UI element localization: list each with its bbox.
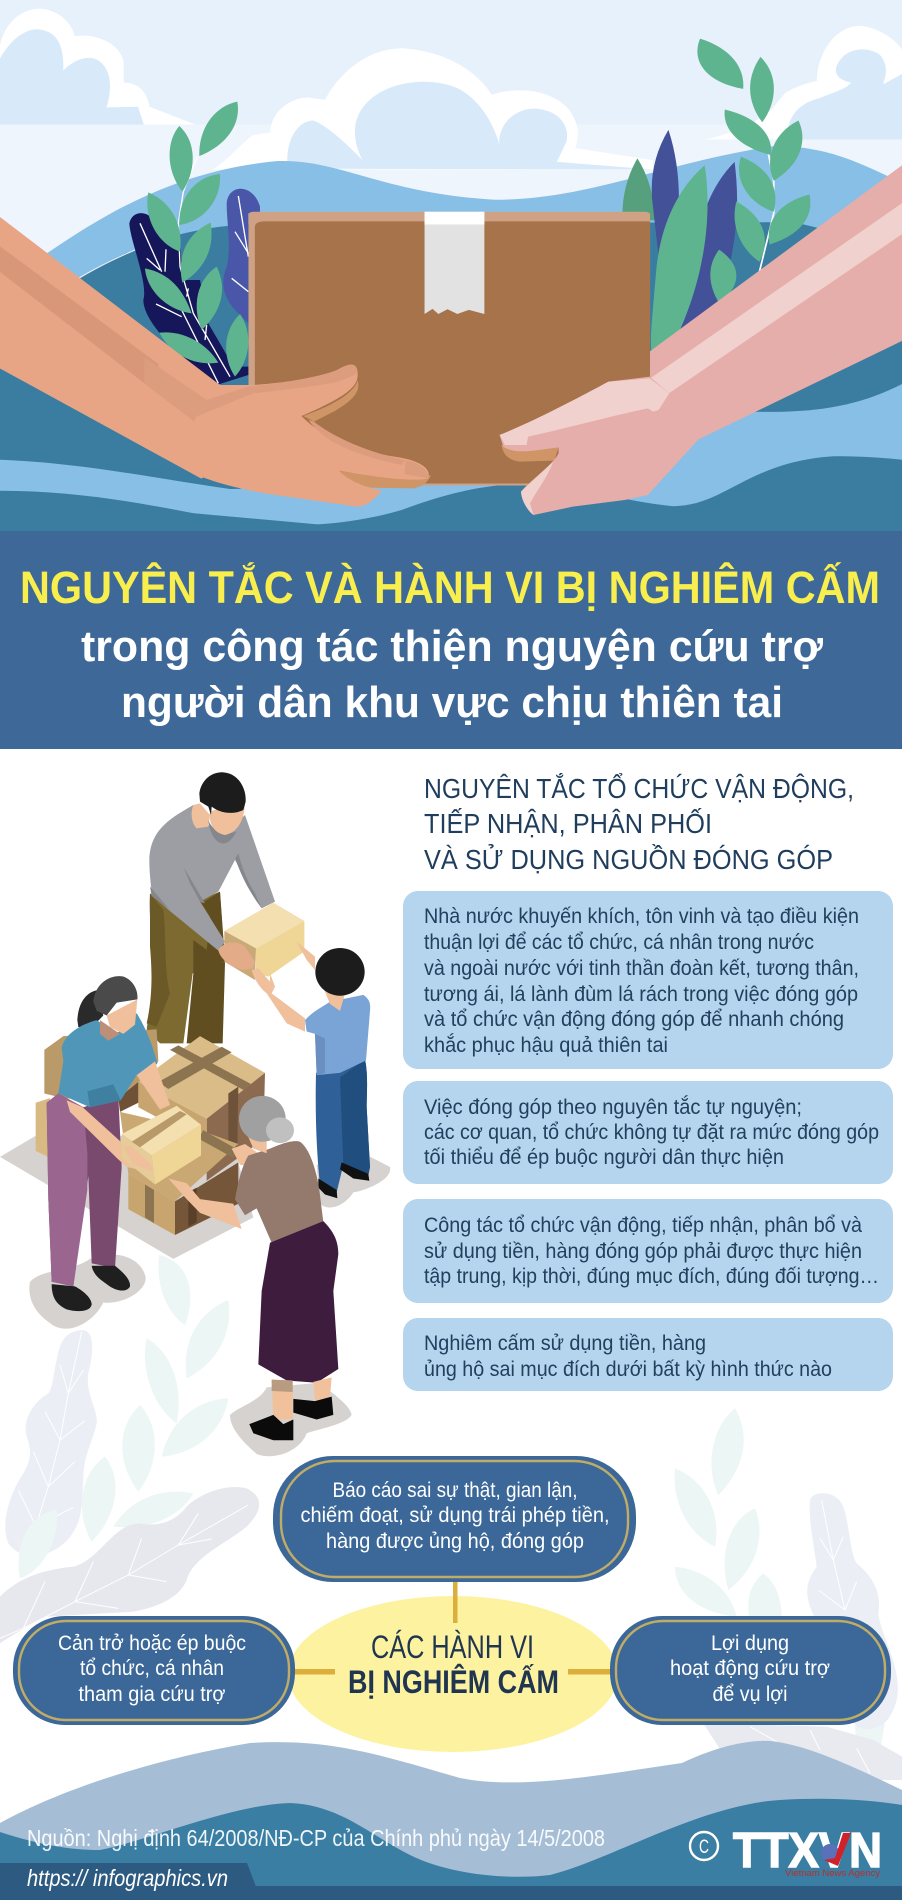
panel: principle 1: Nhà nước khuyến khích, tôn vinh và tạo điều kiện xyxy=(424,905,859,928)
panel: principle 1: và ngoài nước với tinh thần đoàn kết, tương thân, xyxy=(424,957,859,980)
icon: left cloud xyxy=(0,9,196,125)
panel: principle 1: thuận lợi để các tổ chức, cá nhân trong nước xyxy=(424,931,814,954)
panel: false reporting xyxy=(273,1456,636,1582)
heading: principles xyxy=(424,773,854,875)
figure: woman xyxy=(47,976,170,1311)
panel: exploiting: Lợi dụng xyxy=(711,1632,789,1655)
hills: bottom teal wave xyxy=(0,456,902,537)
panel: principle 4: Nghiêm cấm sử dụng tiền, hàng xyxy=(424,1332,706,1355)
hills: light blue xyxy=(0,146,902,537)
panel: principle 3: Công tác tổ chức vận động, tiếp nhận, phân bổ và xyxy=(424,1214,862,1237)
panel: principle 2: tối thiểu để ép buộc người dân thực hiện xyxy=(424,1146,784,1169)
panel: principle 3 xyxy=(403,1199,893,1303)
url tag xyxy=(0,1863,261,1900)
icon: child arms xyxy=(252,942,315,1032)
icon: right hand xyxy=(500,377,698,515)
icon: child head xyxy=(315,948,365,1011)
panel: false reporting: chiếm đoạt, sử dụng trái phép tiền, xyxy=(300,1504,610,1527)
icon: box passed by the man xyxy=(218,903,304,980)
icon: green sprig right xyxy=(697,39,810,272)
panel: exploiting: hoạt động cứu trợ xyxy=(670,1657,830,1680)
panel: false reporting: Báo cáo sai sự thật, gian lận, xyxy=(332,1479,578,1502)
panel: principle 4: ủng hộ sai mục đích dưới bất kỳ hình thức nào xyxy=(424,1358,832,1381)
panel: exploiting: để vụ lợi xyxy=(712,1683,788,1706)
hills: teal middle xyxy=(78,222,823,413)
logo: TTXVN: Vietnam News Agency xyxy=(785,1868,881,1878)
panel: principle 2 xyxy=(403,1081,893,1184)
footer hills xyxy=(0,1741,902,1900)
panel: obstructing: tham gia cứu trợ xyxy=(78,1683,226,1706)
icon: packing tape xyxy=(425,212,484,314)
hills: teal left and right xyxy=(0,327,902,530)
icon: stacked boxes xyxy=(36,1029,265,1235)
centre ellipse: prohibited acts: BỊ NGHIÊM CẤM xyxy=(348,1664,559,1700)
panel: principle 3: tập trung, kịp thời, đúng mục đích, đúng đối tượng… xyxy=(424,1265,879,1288)
heading: principles: VÀ SỬ DỤNG NGUỒN ĐÓNG GÓP xyxy=(424,843,833,875)
figure: man with box and child's arms xyxy=(147,772,315,1043)
connector lines xyxy=(293,1580,612,1674)
icon: hands gripping the box xyxy=(144,347,698,515)
hero illustration: hands passing a parcel xyxy=(0,0,902,537)
url tag: https:// infographics.vn xyxy=(27,1865,228,1891)
source: Nguồn: Nghị định 64/2008/NĐ-CP của Chính phủ ngày 14/5/2008 xyxy=(27,1825,605,1851)
icon: tall plants right xyxy=(622,130,737,351)
floor shadows xyxy=(0,1130,390,1456)
heading: principles: TIẾP NHẬN, PHÂN PHỐI xyxy=(424,807,712,839)
figure: child xyxy=(305,948,370,1198)
icon: woman head xyxy=(93,976,137,1041)
panel: obstructing: tổ chức, cá nhân xyxy=(80,1657,224,1680)
logo: TTXVN: C xyxy=(699,1837,709,1858)
panel: principle 1: tương ái, lá lành đùm lá rách trong việc đóng góp xyxy=(424,983,858,1006)
icon: grandmother head xyxy=(239,1096,294,1153)
background watermark leaves left xyxy=(0,1255,259,1643)
panel: principle 2: các cơ quan, tổ chức không tự đặt ra mức đóng góp xyxy=(424,1121,879,1144)
centre ellipse: prohibited acts xyxy=(288,1596,618,1752)
logo: TTXVN: TTXVN xyxy=(733,1824,882,1878)
hero background: sky, clouds and hills xyxy=(0,0,902,537)
title: line 3: người dân khu vực chịu thiên tai xyxy=(121,678,783,727)
heading: principles: NGUYÊN TẮC TỔ CHỨC VẬN ĐỘNG, xyxy=(424,773,854,804)
panel: principle 1 xyxy=(403,891,893,1069)
icon: man head xyxy=(192,772,246,843)
icon: box held by the woman xyxy=(122,1106,201,1184)
panel: principle 3: sử dụng tiền, hàng đóng góp phải được thực hiện xyxy=(424,1240,862,1263)
panel: obstructing: Cản trở hoặc ép buộc xyxy=(58,1632,246,1655)
background watermark leaves right xyxy=(675,1408,902,1780)
illustration: family sorting donation boxes xyxy=(0,772,390,1456)
icon: centre cloud xyxy=(213,48,653,169)
icon: right cloud xyxy=(705,26,902,139)
title: line 2: trong công tác thiện nguyện cứu trợ xyxy=(81,622,824,671)
icon: left plant xyxy=(129,102,260,385)
panel: principle 2: Việc đóng góp theo nguyên tắc tự nguyện; xyxy=(424,1096,802,1119)
hero foreground: right plants, box and arms xyxy=(0,39,902,486)
hills: light band xyxy=(0,460,495,527)
panel: exploiting xyxy=(610,1616,891,1725)
panel: principle 1: và tổ chức vận động đóng góp để nhanh chóng xyxy=(424,1008,844,1031)
figure: grandmother xyxy=(168,1096,338,1440)
icon: cardboard box xyxy=(249,212,650,486)
centre ellipse: prohibited acts: CÁC HÀNH VI xyxy=(371,1629,534,1665)
icon: left arm xyxy=(0,217,253,479)
icon: left hand xyxy=(144,347,431,507)
title band xyxy=(0,531,902,749)
panel: principle 4 xyxy=(403,1318,893,1391)
panel: principle 1: khắc phục hậu quả thiên tai xyxy=(424,1034,668,1057)
panel: obstructing xyxy=(13,1616,295,1725)
icon: right arm xyxy=(650,165,902,440)
panel: false reporting: hàng được ủng hộ, đóng góp xyxy=(326,1530,584,1553)
